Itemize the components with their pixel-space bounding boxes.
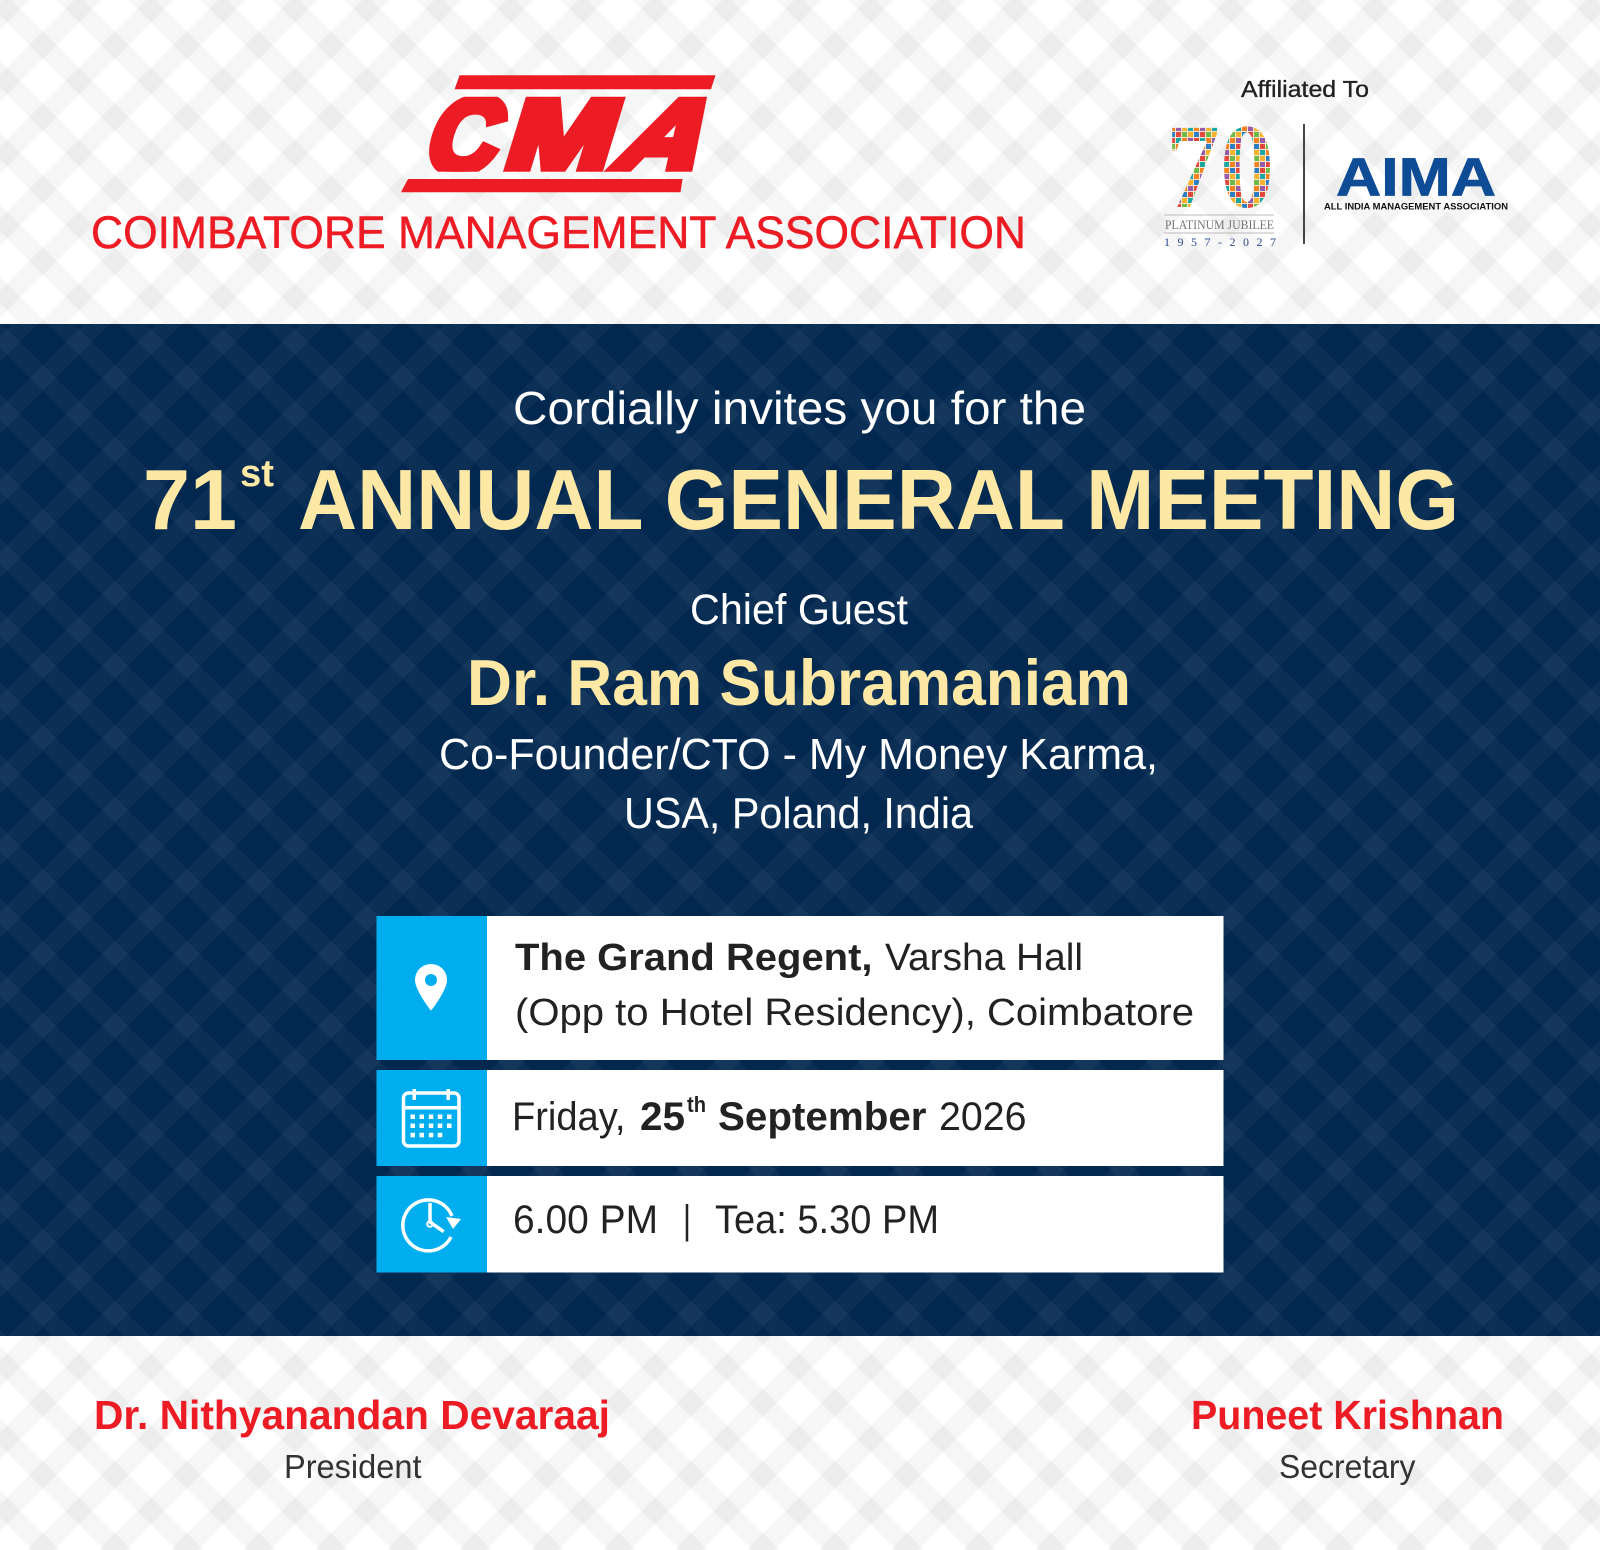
signatory: secretary: Secretary bbox=[1279, 1448, 1416, 1485]
text: venue details: (Opp to Hotel Residency), Coimbatore bbox=[515, 992, 1194, 1034]
logo: CMA: C bbox=[414, 77, 520, 194]
signatory: president: President bbox=[284, 1448, 422, 1485]
text: event time: | bbox=[683, 1198, 691, 1242]
divider between logos bbox=[1303, 124, 1305, 244]
text: chief guest role: USA, Poland, India bbox=[624, 789, 973, 838]
title: annual general meeting: st bbox=[240, 453, 274, 495]
text: event time: 6.00 PM bbox=[513, 1198, 658, 1242]
logo: AIMA: ALL INDIA MANAGEMENT ASSOCIATION bbox=[1324, 202, 1508, 213]
text: chief guest role: Co-Founder/CTO - My Money Karma, bbox=[439, 730, 1158, 779]
panel: navy invitation background bbox=[0, 324, 1600, 1336]
logo: 70 platinum jubilee: 1 9 5 7 - 2 0 2 7 bbox=[1164, 235, 1276, 249]
icon: calendar bbox=[404, 1089, 459, 1146]
text: event time bbox=[513, 1198, 939, 1242]
text: event time: Tea: 5.30 PM bbox=[715, 1198, 939, 1242]
signatory: secretary: Puneet Krishnan bbox=[1191, 1392, 1504, 1438]
logo: CMA: A bbox=[592, 78, 746, 195]
text: invitation line: Cordially invites you for the bbox=[513, 382, 1086, 434]
signatory: president bbox=[94, 1392, 610, 1485]
logo: CMA: M bbox=[493, 77, 635, 194]
text: venue details: Varsha Hall bbox=[885, 937, 1083, 979]
panel: venue bbox=[376, 916, 1224, 1060]
text: venue details bbox=[515, 937, 1194, 1034]
text: event date: th bbox=[687, 1092, 706, 1117]
panel: date bbox=[376, 1070, 1224, 1166]
text: affiliated to: Affiliated To bbox=[1241, 76, 1369, 102]
text: event date: 2026 bbox=[939, 1095, 1026, 1139]
text: event date: Friday, bbox=[512, 1095, 626, 1139]
text: event date: September bbox=[718, 1095, 926, 1139]
logo: CMA bbox=[401, 75, 716, 192]
icon: location pin bbox=[415, 964, 447, 1011]
logo: AIMA bbox=[1324, 147, 1508, 213]
logo: 70 platinum jubilee: 70 bbox=[1166, 100, 1274, 234]
text: event date: 25 bbox=[640, 1095, 685, 1139]
text: chief guest role bbox=[439, 730, 1158, 838]
heading: association name: COIMBATORE MANAGEMENT ASSOCIATION bbox=[91, 207, 1026, 258]
text: chief guest name: Dr. Ram Subramaniam bbox=[467, 646, 1131, 719]
logo: AIMA: AIMA bbox=[1336, 147, 1496, 207]
icon: clock bbox=[403, 1200, 461, 1251]
title: annual general meeting: ANNUAL GENERAL MEETING bbox=[298, 453, 1459, 548]
panel: header background bbox=[0, 0, 1600, 324]
logo: 70 platinum jubilee: PLATINUM JUBILEE bbox=[1165, 217, 1274, 232]
title: annual general meeting: 71 bbox=[143, 453, 237, 548]
text: venue details: The Grand Regent, bbox=[515, 937, 872, 979]
signatory: president: Dr. Nithyanandan Devaraaj bbox=[94, 1392, 610, 1438]
signatory: secretary bbox=[1191, 1392, 1504, 1485]
text: chief guest label: Chief Guest bbox=[690, 586, 908, 634]
panel: time bbox=[376, 1176, 1224, 1272]
panel: footer background bbox=[0, 1336, 1600, 1550]
text: event date bbox=[512, 1092, 1026, 1139]
